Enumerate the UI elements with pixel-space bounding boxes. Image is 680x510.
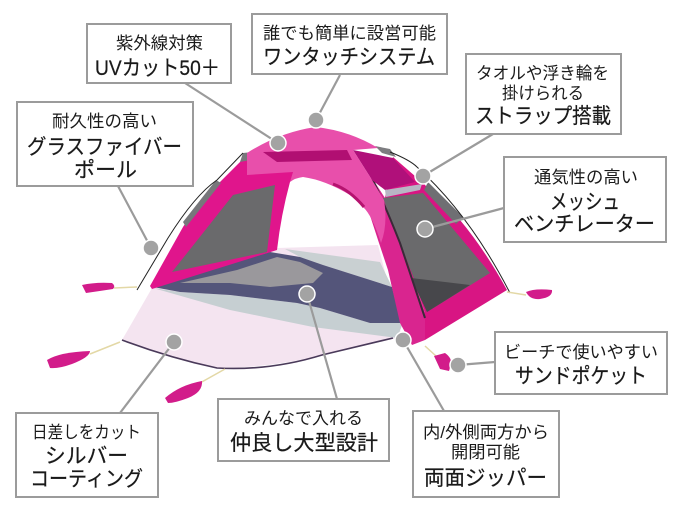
left mesh panel and leg bbox=[150, 151, 296, 289]
support pole bbox=[137, 152, 510, 293]
right mesh panel bbox=[353, 146, 507, 340]
callout: double zipper bbox=[413, 411, 559, 497]
roof shadow band bbox=[263, 150, 352, 162]
sand bag: upper left bbox=[82, 283, 114, 293]
callout: UV cut bbox=[87, 24, 231, 83]
sand bags and ropes bbox=[47, 283, 552, 403]
right leg bbox=[365, 178, 425, 345]
sand bag: sand pocket bbox=[434, 353, 451, 371]
callout: glass fibre pole: ポール bbox=[74, 159, 137, 182]
callout: silver coating bbox=[16, 413, 158, 497]
callout: glass fibre pole: グラスファイバー bbox=[27, 136, 182, 159]
callout: sand pocket: サンドポケット bbox=[515, 365, 647, 388]
callout: one-touch system bbox=[252, 14, 447, 74]
callout: large design: みんなで入れる bbox=[244, 409, 363, 428]
callout: large design bbox=[218, 399, 389, 461]
callout: mesh ventilator: メッシュ bbox=[550, 191, 620, 214]
roof canopy bbox=[247, 127, 385, 243]
callout: mesh ventilator bbox=[504, 157, 666, 242]
callout: mesh ventilator: 通気性の高い bbox=[534, 168, 638, 187]
callout: large design: 仲良し大型設計 bbox=[230, 432, 378, 455]
sand bag: right bbox=[526, 289, 552, 299]
callout: strap: ストラップ搭載 bbox=[475, 105, 611, 128]
callout: double zipper: 内/外側両方から bbox=[423, 423, 549, 442]
sand bag: middle left bbox=[47, 351, 90, 368]
callout: silver coating: 日差しをカット bbox=[32, 423, 141, 442]
callout: double zipper: 開閉可能 bbox=[451, 443, 520, 462]
callout: strap: タオルや浮き輪を bbox=[476, 64, 609, 83]
callout: silver coating: シルバー bbox=[45, 445, 128, 468]
callout: one-touch system: 誰でも簡単に設営可能 bbox=[263, 24, 436, 43]
callout: one-touch system: ワンタッチシステム bbox=[263, 46, 435, 69]
callout: mesh ventilator: ベンチレーター bbox=[514, 213, 655, 236]
callout: sand pocket bbox=[495, 332, 667, 394]
leader lines bbox=[118, 75, 504, 413]
callout: sand pocket: ビーチで使いやすい bbox=[504, 342, 658, 362]
callout: UV cut: 紫外線対策 bbox=[116, 34, 203, 53]
callout: strap bbox=[466, 54, 621, 134]
callout: UV cut: UVカット50＋ bbox=[95, 57, 220, 80]
tent opening ruffle bbox=[333, 184, 364, 207]
callout: silver coating: コーティング bbox=[30, 468, 143, 491]
sand bag: bottom bbox=[165, 381, 202, 403]
callout: double zipper: 両面ジッパー bbox=[424, 467, 547, 490]
ground sheet bbox=[122, 245, 403, 368]
marker dots bbox=[143, 112, 466, 373]
callout: glass fibre pole bbox=[17, 102, 193, 186]
illustration: pink beach tent bbox=[122, 127, 510, 368]
callout: glass fibre pole: 耐久性の高い bbox=[52, 112, 157, 131]
callout: strap: 掛けられる bbox=[502, 84, 584, 103]
